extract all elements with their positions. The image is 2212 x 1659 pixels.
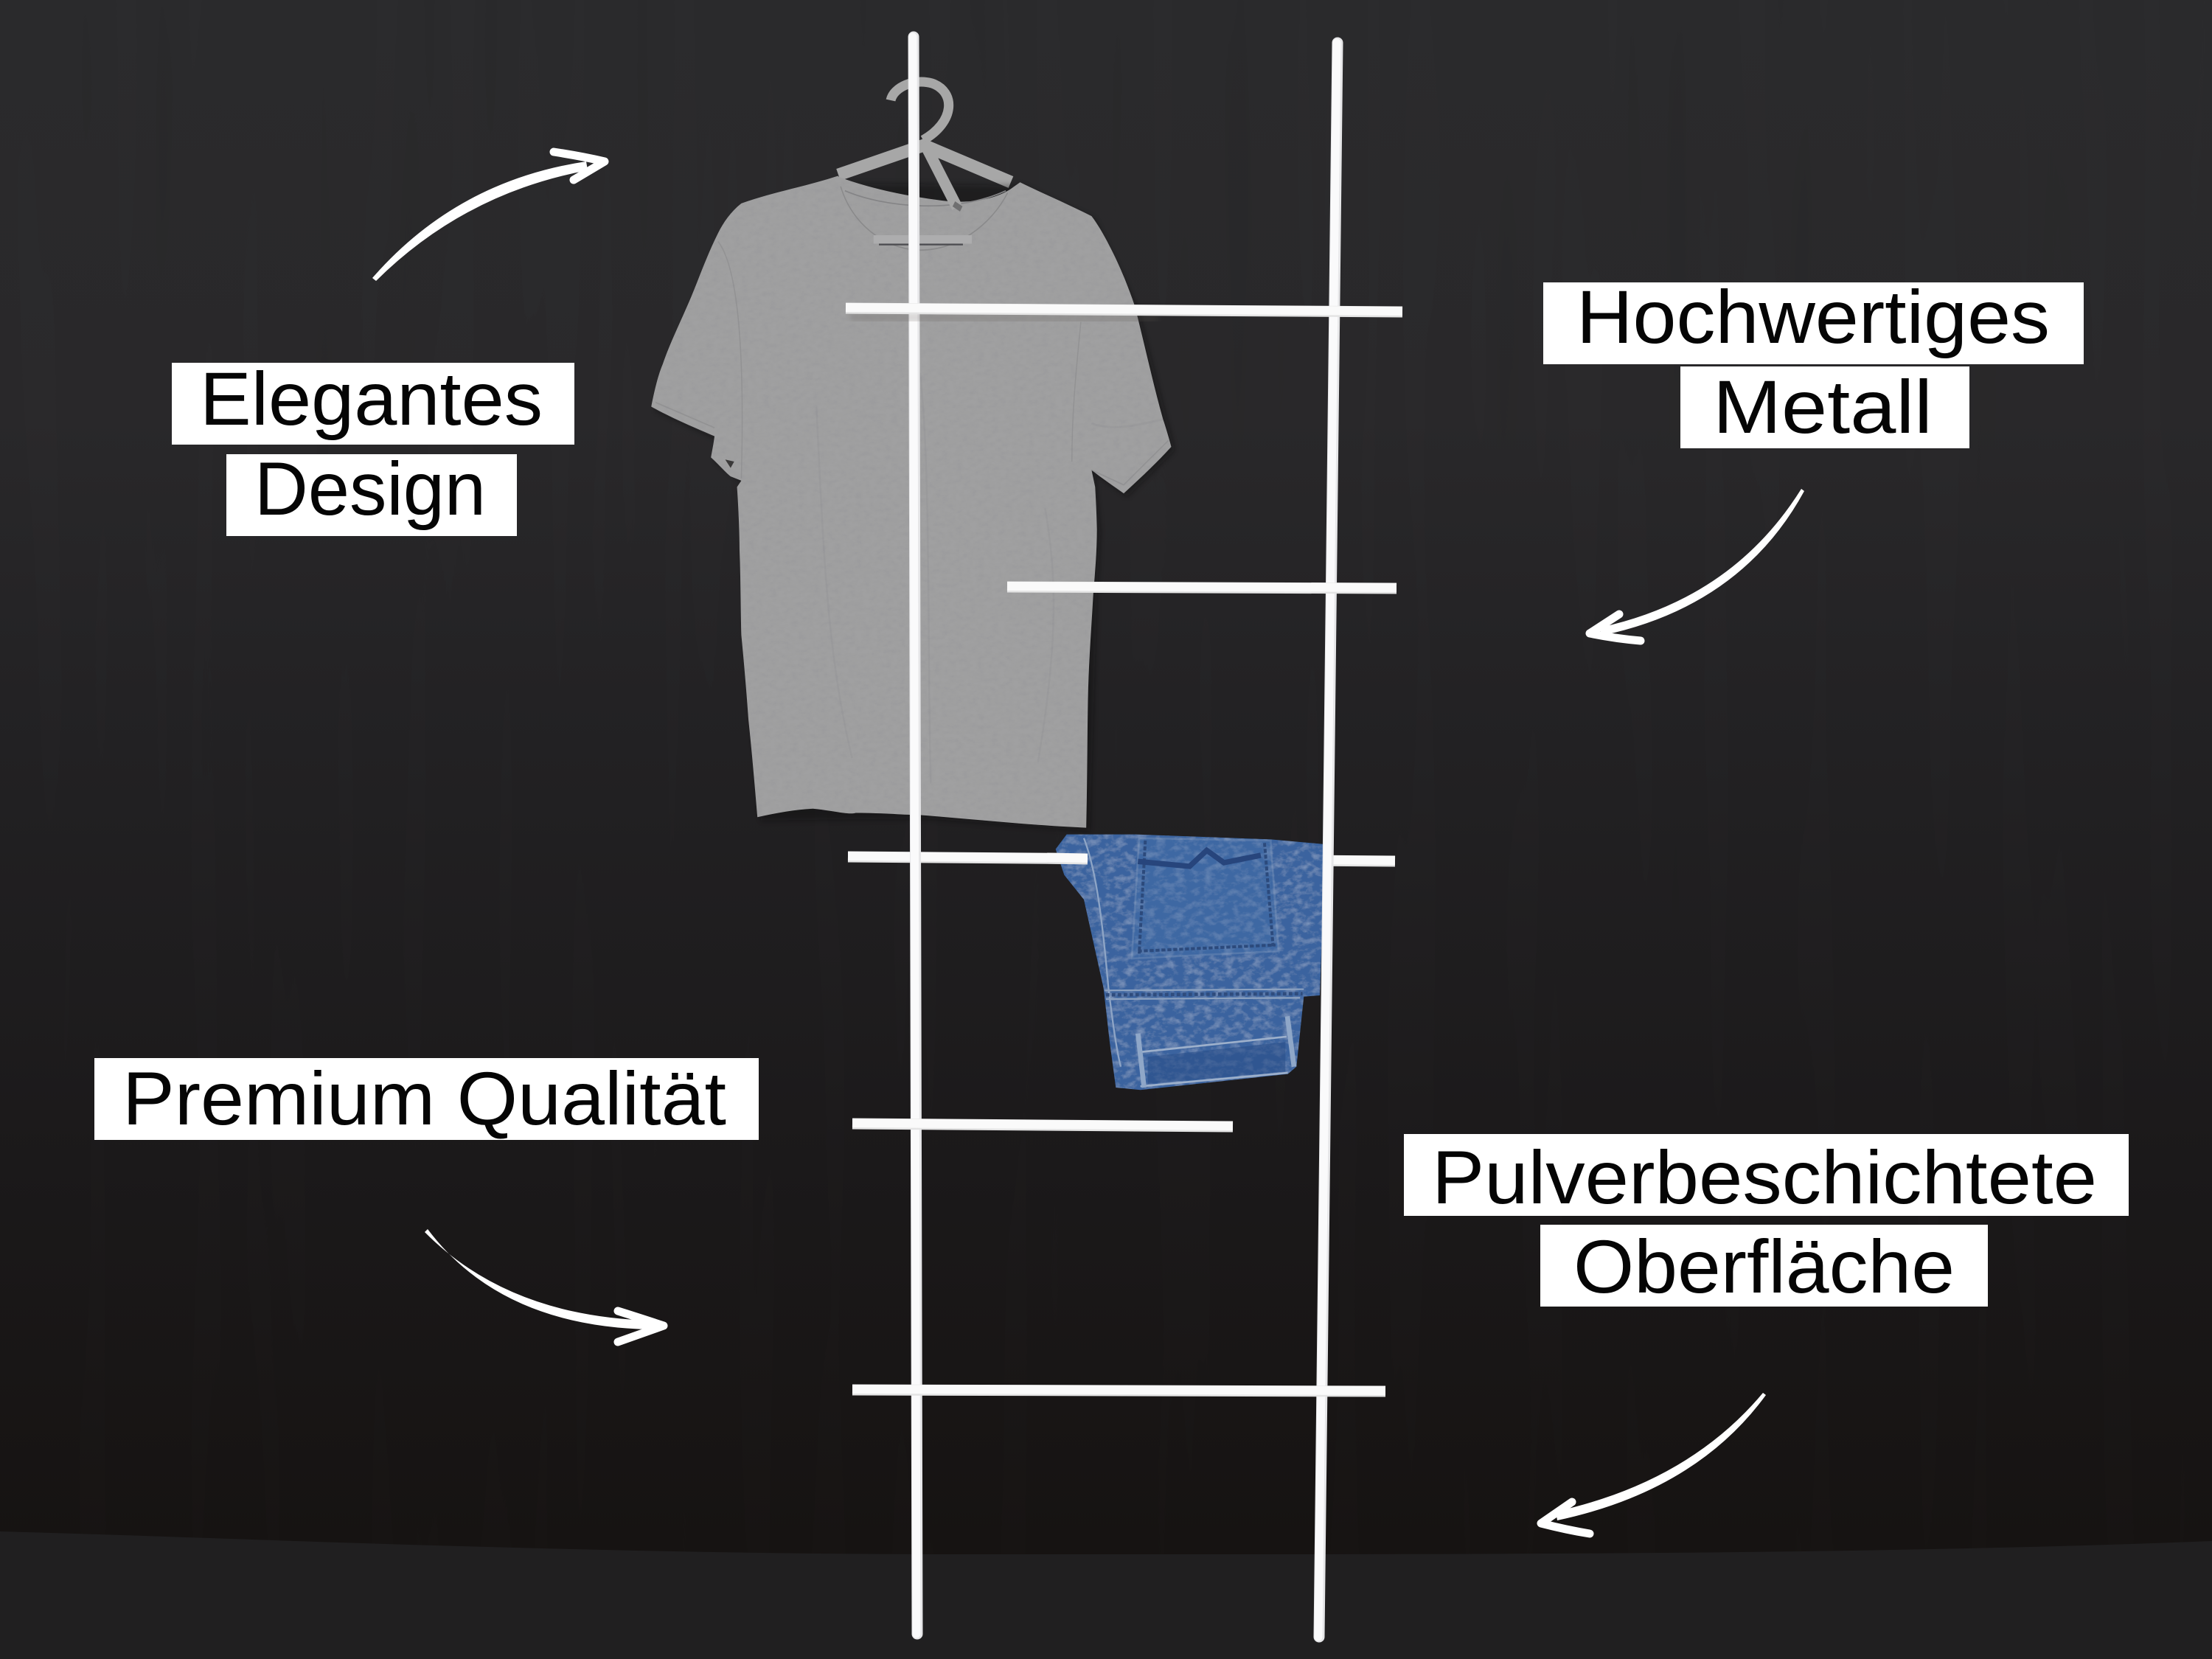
jeans back pocket [1132, 838, 1279, 959]
rod: first crossbar [846, 307, 1402, 319]
jeans hem [1141, 1037, 1288, 1086]
t-shirt body [651, 176, 1172, 828]
rod: fourth crossbar [852, 1123, 1233, 1127]
t-shirt [651, 142, 1175, 831]
callout: Elegantes Design [172, 357, 574, 536]
label box line 2 [1540, 1225, 1988, 1307]
rod: second crossbar [1007, 586, 1397, 588]
t-shirt wrinkles [816, 373, 1163, 783]
background: floor [0, 1531, 2212, 1659]
label box line 1 [1404, 1134, 2129, 1216]
t-shirt collar seam [841, 187, 1008, 250]
rod: fifth crossbar [852, 1389, 1385, 1391]
jeans [1056, 835, 1325, 1090]
hanger bar shadow [879, 243, 963, 246]
label box [94, 1058, 759, 1140]
label text line 1: Hochwertiges [1576, 275, 2050, 359]
rod: left upright [913, 37, 917, 1634]
t-shirt shadow [655, 184, 1175, 831]
hanger lower bar [874, 235, 972, 243]
arrow: high-quality metal [1590, 489, 1804, 641]
jeans darker lower band [1148, 1042, 1285, 1084]
arrow: premium quality [425, 1229, 664, 1342]
t-shirt sleeve seams [655, 242, 1169, 485]
jeans waist stitching [1106, 994, 1303, 995]
callout: Pulverbeschichtete Oberfläche [1404, 1134, 2129, 1309]
jeans waist seam [1105, 990, 1304, 999]
label box line 1 [1543, 282, 2084, 364]
label text line 2: Metall [1713, 365, 1933, 449]
label text line 1: Elegantes [200, 357, 543, 441]
jeans body [1056, 835, 1325, 1090]
label box line 2 [226, 454, 517, 536]
rod: third crossbar [848, 856, 1395, 861]
t-shirt dark sleeve fold [726, 459, 734, 468]
label text: Premium Qualität [122, 1057, 726, 1141]
jeans pocket stitching [1138, 841, 1276, 953]
label text line 1: Pulverbeschichtete [1432, 1135, 2097, 1220]
hanger strap [924, 142, 957, 207]
t-shirt inner neck band [845, 191, 1006, 206]
hanger [838, 82, 1011, 182]
arrow: elegant design [372, 152, 605, 281]
label box line 1 [172, 363, 574, 445]
callout: Hochwertiges Metall [1543, 275, 2084, 449]
jeans pocket zigzag [1138, 850, 1261, 866]
hanger hook [891, 82, 949, 140]
arrow: powder-coated surface [1541, 1393, 1766, 1534]
jeans belt loops [1138, 1016, 1294, 1088]
label text line 2: Oberfläche [1573, 1225, 1955, 1309]
hanger end cap [953, 201, 962, 212]
callout: Premium Qualität [94, 1057, 759, 1141]
hanger arms [838, 145, 1011, 182]
label text line 2: Design [254, 447, 486, 531]
jeans side seam [1084, 838, 1121, 1067]
rod: third crossbar over back fold of jeans [1047, 858, 1088, 859]
rod: right upright [1318, 43, 1338, 1637]
label box line 2 [1680, 366, 1969, 448]
